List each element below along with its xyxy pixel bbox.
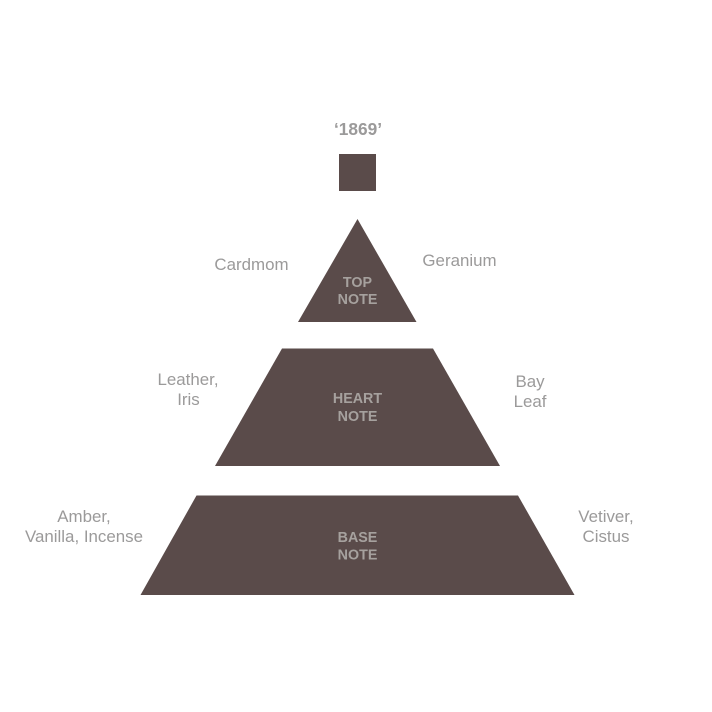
top note tier: TOP [343,275,373,291]
label: Amber, Vanilla, Incense: Amber, [57,507,111,526]
top note tier [298,219,416,322]
heart note tier: NOTE [338,409,377,425]
label: Vetiver, Cistus: Cistus [583,527,629,546]
heart note tier [215,348,500,466]
label: Vetiver, Cistus [578,507,634,546]
base note tier [140,496,574,595]
title: 1869: ‘1869’ [334,119,382,139]
label: Geranium: Geranium [422,251,497,270]
label: Leather, Iris: Leather, [157,370,219,389]
label: Bay Leaf: Bay [515,372,545,391]
label: Leather, Iris [157,370,219,409]
label: Bay Leaf [514,372,547,411]
label: Leather, Iris: Iris [177,390,200,409]
heart note tier: HEART [333,391,382,407]
label: Cardmom: Cardmom [214,255,289,274]
pyramid apex square [339,154,376,191]
base note tier: NOTE [338,548,377,564]
top note tier: NOTE [338,292,377,308]
label: Amber, Vanilla, Incense: Vanilla, Incense [25,527,143,546]
base note tier: BASE [338,530,377,546]
label: Vetiver, Cistus: Vetiver, [578,507,634,526]
label: Amber, Vanilla, Incense [25,507,143,546]
label: Bay Leaf: Leaf [514,392,547,411]
